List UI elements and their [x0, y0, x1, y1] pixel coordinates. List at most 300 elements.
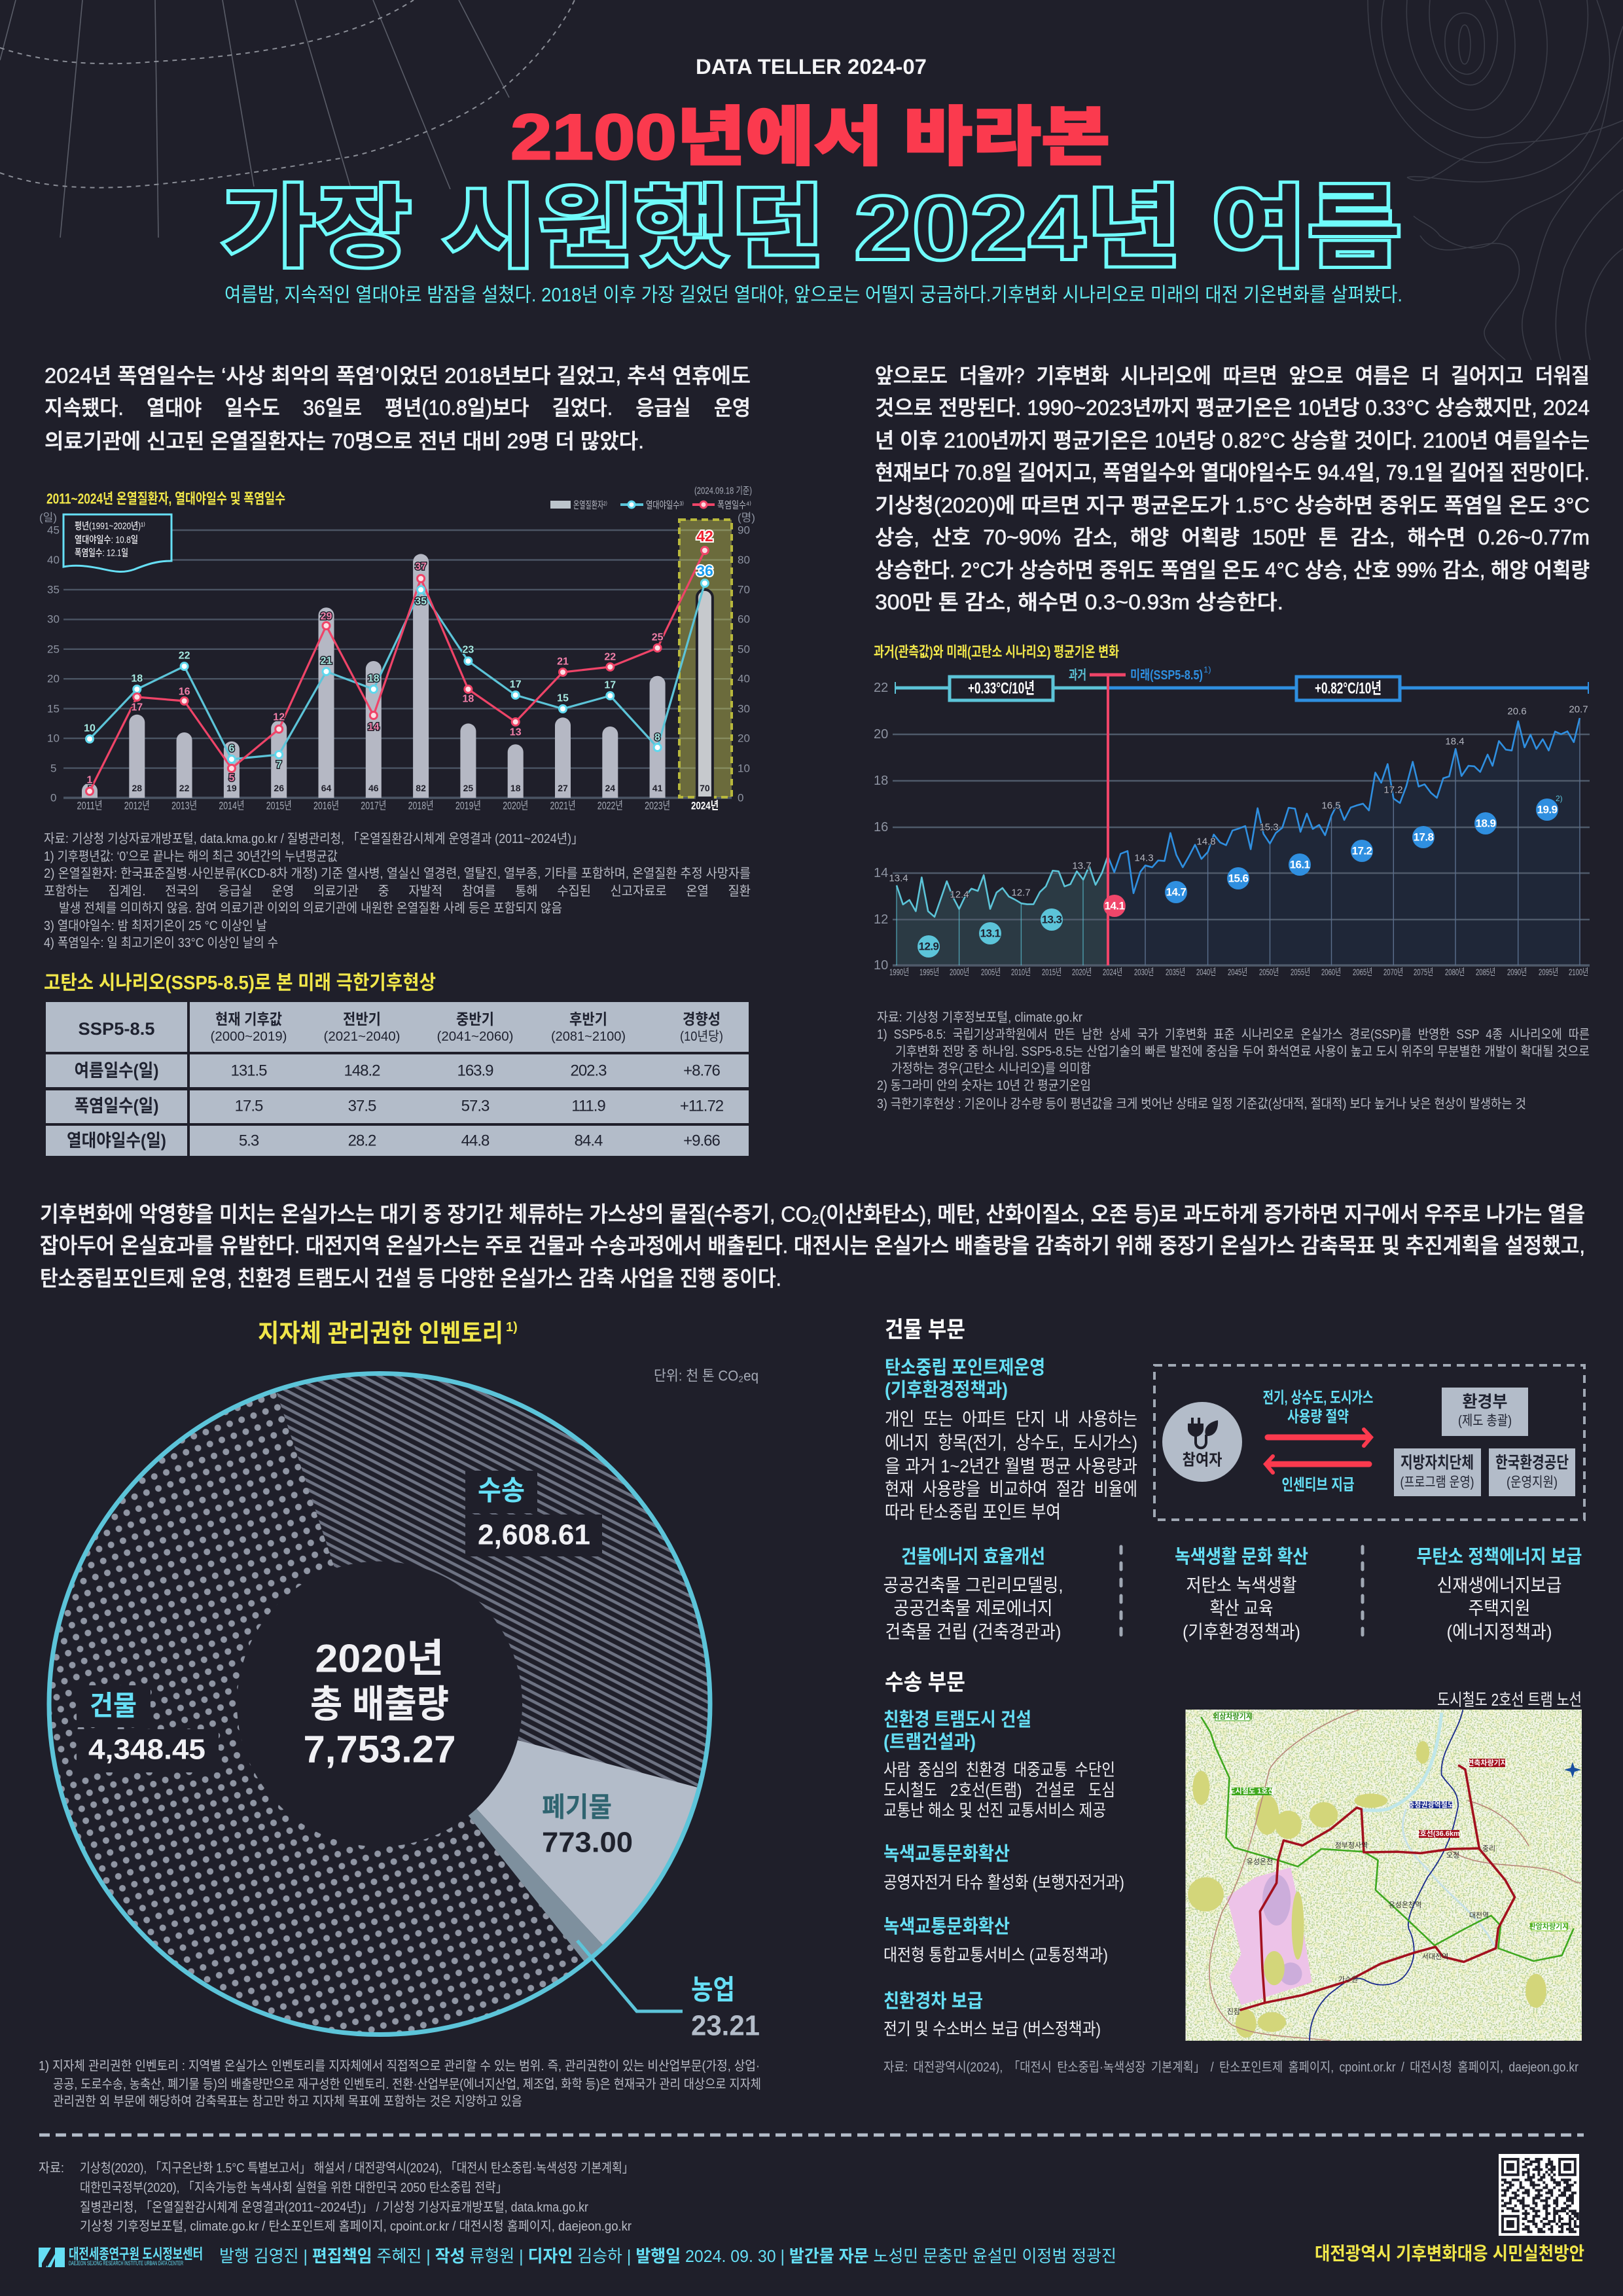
source notes for chart 2: 가정하는 경우(고탄소 시나리오)를 의미함: [891, 1061, 1091, 1076]
axis labels: 5: [50, 762, 56, 775]
table header: [79, 1011, 723, 1044]
decade average bubbles: 13.3: [1042, 914, 1061, 925]
footer sources: 자료:: [39, 2161, 64, 2176]
column: green life culture: 저탄소 녹색생활: [1186, 1575, 1297, 1596]
x axis labels: 2000년: [950, 967, 969, 977]
box: environment corporation: 한국환경공단: [1495, 1454, 1569, 1472]
axis labels: 35: [47, 584, 60, 596]
line: heat wave days: [90, 550, 705, 791]
source notes for chart 2: 3) 극한기후현상 : 기온이나 강수량 등이 평년값을 크게 벗어난 상태로 일정 기준값(상대적, 절대적) 보다 높거나 낮은 현상이 발생하는 것: [877, 1096, 1526, 1111]
map: tram line 2: [1186, 1710, 1582, 2041]
intro text right: 것으로 전망된다. 1990~2023년까지 평균기온은 10년당 0.33°C 상승했지만, 2024: [875, 396, 1590, 420]
table header: 전반기: [343, 1011, 381, 1028]
x axis labels: 2020년: [1072, 967, 1092, 977]
x axis labels: 2085년: [1476, 967, 1495, 977]
table header: SSP5-8.5: [79, 1019, 154, 1039]
axis labels: (명): [738, 512, 755, 524]
row: summer days: 202.3: [570, 1062, 607, 1080]
y axis labels: 16: [874, 820, 888, 834]
carbon neutral point text: [885, 1357, 1137, 1522]
tram city text: [883, 1709, 1115, 1820]
segment: transport: [276, 1374, 709, 1787]
x axis labels: 2035년: [1166, 967, 1185, 977]
carbon neutral point text: (기후환경정책과): [885, 1379, 1008, 1401]
intro text right: 기상청(2020)에 따르면 지구 평균온도가 1.5°C 상승하면 중위도 폭염일 온도 3°C: [875, 493, 1590, 517]
value labels: tropical nights: 21: [321, 656, 332, 666]
callout: normal values: 평년(1991~2020년)¹⁾: [75, 521, 145, 531]
value labels: tropical nights: 15: [557, 692, 569, 704]
arrow: saving: [1268, 1429, 1371, 1446]
source notes for chart 1: [44, 831, 751, 950]
value labels: heat wave days: 13: [510, 726, 522, 738]
header: [221, 55, 1402, 306]
segment: agriculture: [469, 1809, 603, 1962]
label: saving: [1263, 1389, 1373, 1426]
table header: (10년당): [680, 1029, 723, 1044]
value labels: 14.3: [1134, 852, 1154, 864]
row: summer days: 148.2: [344, 1062, 380, 1080]
intro text left: 지속됐다. 열대야 일수도 36일로 평년(10.8일)보다 길었다. 응급실 운영: [45, 396, 751, 420]
row: heat wave days: 57.3: [461, 1097, 490, 1115]
column: building energy efficiency: 건물에너지 효율개선: [901, 1546, 1045, 1568]
y axis labels: 10: [874, 958, 888, 973]
footer sources: 대한민국정부(2020), 「지속가능한 녹색사회 실현을 위한 대한민국 2050 탄소중립 전략」: [80, 2180, 507, 2195]
legend: 온열질환자²⁾: [573, 500, 607, 511]
value labels: 20.6: [1507, 706, 1527, 717]
source notes for chart 1: 2) 온열질환자: 한국표준질병·사인분류(KCD-8차 개정) 기준 열사병, 열실신 열경련, 열탈진, 열부종, 기타를 포함하며, 온열질환 추정 사망자를: [44, 866, 751, 881]
tram city text: 친환경 트램도시 건설: [883, 1709, 1031, 1731]
axis labels: 80: [738, 554, 750, 566]
axis labels: 90: [738, 524, 750, 537]
participant circle: [1162, 1402, 1242, 1482]
value labels: heat wave days: 25: [652, 632, 664, 643]
bar value labels: [87, 783, 710, 793]
column: green life culture: 확산 교육: [1209, 1598, 1274, 1618]
x axis labels: 2010년: [1011, 967, 1031, 977]
grid lines: [63, 530, 732, 798]
value labels: heat wave days: 18: [463, 694, 474, 704]
value labels: 13.7: [1072, 860, 1092, 872]
line: tropical nights: [90, 583, 705, 759]
column: building energy efficiency: [883, 1546, 1063, 1641]
mid paragraph: [40, 1202, 1585, 1291]
subtitle: 여름밤, 지속적인 열대야로 밤잠을 설쳤다. 2018년 이후 가장 길었던 열대야, 앞으로는 어떨지 궁금하다.기후변화 시나리오로 미래의 대전 기온변화를 살펴봤다.: [224, 284, 1402, 306]
legend: 열대야일수³⁾: [646, 500, 684, 511]
bar value labels: 22: [179, 783, 190, 793]
value labels: tropical nights: 18: [368, 673, 380, 685]
decade average bubbles: 12.9: [919, 940, 938, 953]
intro text left: [45, 364, 751, 453]
year labels: 2019년: [455, 800, 481, 812]
table: extreme climate under SSP5-8.5: [44, 973, 749, 1156]
value labels: heat wave days: 5: [228, 772, 234, 784]
eco car text: 친환경차 보급: [883, 1990, 983, 2012]
section heading: 수송 부문: [885, 1670, 965, 1695]
intro text right: 상승한다. 2°C가 상승하면 중위도 폭염일 온도 4°C 상승, 산호 99% 감소, 해양 어획량: [875, 558, 1590, 582]
bar value labels: 5: [87, 783, 92, 793]
bar value labels: 25: [463, 783, 473, 793]
label: buildings: 건물: [90, 1690, 137, 1721]
table title: 고탄소 시나리오(SSP5-8.5)로 본 미래 극한기후현상: [44, 973, 436, 994]
row: summer days: 여름일수(일): [75, 1061, 158, 1081]
value labels: 12.7: [1011, 888, 1031, 898]
year labels: 2022년: [597, 800, 623, 812]
carbon neutral point text: 개인 또는 아파트 단지 내 사용하는: [885, 1408, 1137, 1429]
row: heat wave days: [75, 1096, 724, 1116]
map tags: 유성온천역: [1389, 1900, 1421, 1909]
row: tropical nights: +9.66: [683, 1132, 721, 1149]
y axis labels: [874, 681, 888, 973]
row: tropical nights: [67, 1131, 721, 1151]
bar value labels: 46: [368, 783, 379, 793]
label: agriculture: 농업: [691, 1974, 735, 2005]
bike text: 공영자전거 타슈 활성화 (보행자전거과): [883, 1873, 1124, 1892]
carbon neutral point text: 에너지 항목(전기, 상수도, 도시가스): [885, 1432, 1137, 1453]
table header: (2081~2100): [551, 1030, 626, 1044]
axis labels: 25: [47, 643, 60, 656]
trend bar: future: [1108, 677, 1588, 700]
intro text right: 상승, 산호 70~90% 감소, 해양 어획량 150만 톤 감소, 해수면 0.26~0.77m: [875, 526, 1590, 549]
donut footnote: 관리권한 외 부문에 해당하여 감축목표는 참고만 하고 지자체 목표에 포함하는 것은 지양하고 있음: [53, 2094, 522, 2109]
value labels: heat wave days: 14: [368, 721, 380, 733]
row: heat wave days: +11.72: [680, 1097, 724, 1115]
axis labels: (일): [39, 512, 57, 524]
column: building energy efficiency: 공공건축물 그린리모델링,: [883, 1575, 1063, 1596]
section: transport sector: [883, 1670, 1582, 2075]
x axis labels: 2065년: [1353, 967, 1372, 977]
axis labels: 30: [738, 703, 750, 715]
2024 highlight: [679, 520, 732, 797]
markers: heat wave days: [86, 547, 708, 795]
x axis labels: 2045년: [1228, 967, 1247, 977]
box: ministry: (제도 총괄): [1458, 1414, 1512, 1428]
intro text right: 300만 톤 감소, 해수면 0.3~0.93m 상승한다.: [875, 590, 1283, 614]
trend bar: past: [895, 677, 1108, 700]
bar value labels: 18: [510, 783, 521, 793]
issue label: DATA TELLER 2024-07: [696, 55, 927, 79]
decade average bubbles: 18.9: [1476, 817, 1495, 830]
map tags: 오정: [1446, 1851, 1459, 1859]
y axis labels: 12: [874, 912, 888, 927]
x axis labels: 2055년: [1291, 967, 1310, 977]
bar value labels: 28: [132, 783, 142, 793]
intro text right: 년 이후 2100년까지 평균기온은 10년당 0.82°C 상승할 것이다. 2100년 여름일수는: [875, 429, 1590, 452]
x axis labels: 2030년: [1134, 967, 1154, 977]
chart title: 과거(관측값)와 미래(고탄소 시나리오) 평균기온 변화: [874, 644, 1119, 660]
map tags: 중리: [1482, 1844, 1495, 1853]
leader line: agriculture: [577, 1941, 683, 2011]
label: buildings: [77, 1685, 219, 1772]
bar value labels: 27: [558, 783, 568, 793]
map tags: 2호선(36.6km): [1416, 1829, 1463, 1838]
bike text: [883, 1843, 1124, 1892]
logo: institute: [39, 2246, 203, 2267]
decade average bubbles: 13.1: [980, 927, 1000, 940]
box: environment corporation: [1489, 1448, 1575, 1496]
map tags: 충청권광역철도: [1408, 1800, 1454, 1809]
x axis labels: 2015년: [1042, 967, 1061, 977]
source notes for chart 2: [877, 1010, 1590, 1111]
column: building energy efficiency: 공공건축물 제로에너지: [894, 1598, 1052, 1618]
bike text: 녹색교통문화확산: [883, 1843, 1010, 1865]
divider 2024: 1): [1204, 665, 1211, 674]
label: transport: 수송: [478, 1475, 525, 1505]
carbon neutral point text: 현재 사용량을 비교하여 절감 비율에: [885, 1479, 1137, 1499]
label: waste: [542, 1792, 633, 1859]
axis labels: [39, 512, 755, 804]
x axis labels: 2090년: [1507, 967, 1527, 977]
table header: (2021~2040): [323, 1030, 401, 1044]
arrow: incentive: [1266, 1456, 1369, 1473]
source notes for chart 1: 자료: 기상청 기상자료개방포털, data.kma.go.kr / 질병관리청, 「온열질환감시체계 운영결과 (2011~2024년)」: [44, 831, 583, 846]
trend bar: past: +0.33°C/10년: [968, 679, 1035, 698]
map tags: 가수원: [1338, 1975, 1358, 1984]
value labels: tropical nights: 35: [415, 596, 427, 607]
axis labels: 20: [738, 732, 750, 745]
year labels: [77, 800, 719, 812]
value labels: tropical nights: 7: [276, 759, 282, 771]
intro text left: 의료기관에 신고된 온열질환자는 70명으로 전년 대비 29명 더 많았다.: [45, 429, 644, 453]
donut chart: local-authority inventory: [49, 1320, 760, 2042]
decade average bubbles: 19.9: [1537, 804, 1557, 816]
value labels: [889, 704, 1588, 901]
integrated transport text: 대전형 통합교통서비스 (교통정책과): [883, 1945, 1108, 1965]
y axis labels: 18: [874, 774, 888, 788]
year labels: 2012년: [124, 800, 150, 812]
box: local government: 지방자치단체: [1400, 1454, 1474, 1472]
center total: 2020년: [315, 1636, 444, 1681]
axis labels: 15: [47, 703, 60, 715]
value labels: 18.4: [1445, 736, 1465, 747]
row: tropical nights: 28.2: [348, 1132, 376, 1149]
x axis labels: 2095년: [1539, 967, 1558, 977]
value labels: heat wave days: 1: [87, 775, 93, 785]
column: building energy efficiency: 건축물 건립 (건축경관과): [885, 1622, 1061, 1641]
bar value labels: 41: [652, 783, 663, 793]
y axis labels: 20: [874, 727, 888, 742]
bar value labels: 64: [321, 783, 331, 793]
column: carbon-free energy: 무탄소 정책에너지 보급: [1416, 1546, 1582, 1568]
segment: waste: [476, 1740, 699, 1946]
section: building sector: [883, 1318, 1584, 1641]
box: environment corporation: (운영지원): [1507, 1475, 1558, 1490]
value labels: tropical nights: 10: [84, 723, 96, 734]
icon: compass: [1564, 1762, 1581, 1778]
row: summer days: [75, 1061, 721, 1081]
axis labels: 60: [738, 613, 750, 626]
value labels: 12.4: [950, 889, 969, 901]
value labels: heat wave days: 21: [557, 656, 569, 668]
integrated transport text: [883, 1916, 1108, 1965]
x axis labels: 2050년: [1259, 967, 1279, 977]
axis labels: 40: [47, 554, 60, 566]
axis labels: 50: [738, 643, 750, 656]
label: agriculture: 23.21: [691, 2009, 760, 2042]
value labels: 14.8: [1196, 836, 1216, 847]
axis labels: 10: [47, 732, 60, 745]
diagram: carbon point flow: [1154, 1365, 1584, 1520]
section heading: 건물 부문: [885, 1318, 965, 1342]
x axis labels: 2040년: [1196, 967, 1216, 977]
x axis labels: 2075년: [1414, 967, 1433, 977]
donut footnote: [39, 2058, 761, 2109]
x axis labels: 2070년: [1383, 967, 1403, 977]
table header: (2041~2060): [437, 1030, 513, 1044]
column: green life culture: [1175, 1546, 1308, 1641]
label: buildings: 4,348.45: [88, 1733, 205, 1766]
decade average bubbles: 15.6: [1228, 872, 1248, 885]
y axis labels: 14: [874, 866, 888, 880]
donut footnote: 공공, 도로수송, 농축산, 폐기물 등)의 배출량만으로 재구성한 인벤토리. 전환·산업부문(에너지산업, 제조업, 화학 등)은 현재국가 관리 대상으로 지자체: [53, 2077, 761, 2092]
value labels: heat wave days: 16: [179, 686, 190, 698]
row: heat wave days: 111.9: [571, 1097, 605, 1115]
row: summer days: 163.9: [457, 1062, 493, 1080]
row: tropical nights: 5.3: [239, 1132, 259, 1149]
footer sources: 질병관리청, 「온열질환감시체계 운영결과(2011~2024년)」 / 기상청 기상자료개방포털, data.kma.go.kr: [80, 2200, 588, 2215]
outer ring: [49, 1373, 710, 2034]
table header: 현재 기후값: [215, 1011, 282, 1028]
value labels: tropical nights: 22: [179, 651, 190, 661]
source notes for chart 1: 4) 폭염일수: 일 최고기온이 33°C 이상인 날의 수: [44, 935, 278, 950]
callout: normal values: 열대야일수: 10.8일: [75, 534, 138, 546]
mid paragraph: 탄소중립포인트제 운영, 친환경 트램도시 건설 등 다양한 온실가스 감축 사업을 진행 중이다.: [40, 1266, 781, 1291]
label: incentive: 인센티브 지급: [1281, 1477, 1355, 1494]
row: tropical nights: 84.4: [575, 1132, 603, 1149]
row: heat wave days: 폭염일수(일): [75, 1096, 158, 1116]
map tags: 외삼차량기지: [1213, 1712, 1253, 1721]
column: green life culture: 녹색생활 문화 확산: [1175, 1546, 1308, 1568]
value labels: heat wave days: 42: [696, 528, 713, 545]
logo: institute: DAEJEON SEJONG RESEARCH INSTITUTE URBAN DATA CENTER: [69, 2260, 183, 2267]
map tags: 진잠: [1227, 2007, 1240, 2016]
tram city text: 교통난 해소 및 선진 교통서비스 제공: [883, 1801, 1106, 1820]
title line 2: 가장 시원했던 2024년 여름: [221, 177, 1402, 279]
year labels: 2011년: [77, 800, 102, 812]
x axis labels: 2100년: [1569, 967, 1588, 977]
label: transport: [465, 1471, 602, 1556]
row: summer days: 131.5: [230, 1062, 267, 1080]
map tags: 정부청사역: [1335, 1841, 1368, 1850]
box: ministry: 환경부: [1462, 1393, 1508, 1411]
value labels: 16.5: [1321, 800, 1341, 812]
decade average bubbles: 14.1: [1105, 899, 1124, 912]
x axis labels: [889, 967, 1588, 977]
value labels: tropical nights: 17: [604, 679, 616, 691]
decade average bubbles: 16.1: [1290, 859, 1310, 870]
axis labels: 70: [738, 584, 750, 596]
year labels: 2013년: [171, 800, 197, 812]
participant circle: 참여자: [1182, 1452, 1222, 1469]
decorative globe lines: [0, 0, 575, 238]
column: green life culture: (기후환경정책과): [1183, 1622, 1300, 1641]
chart title: 2011~2024년 온열질환자, 열대야일수 및 폭염일수: [46, 491, 285, 507]
temperature lines: [897, 718, 1580, 917]
year labels: 2020년: [503, 800, 528, 812]
box: local government: (프로그램 운영): [1400, 1475, 1474, 1490]
row: heat wave days: 37.5: [348, 1097, 376, 1115]
eco car text: [883, 1990, 1101, 2039]
temperature area fills: [897, 718, 1580, 965]
year labels: 2014년: [219, 800, 244, 812]
tram city text: 사람 중심의 친환경 대중교통 수단인: [883, 1760, 1115, 1780]
center total: 총 배출량: [310, 1683, 449, 1725]
table header: 경향성: [683, 1011, 721, 1028]
label: agriculture: [691, 1974, 760, 2042]
row: tropical nights: 열대야일수(일): [67, 1131, 166, 1151]
source notes for chart 2: 2) 동그라미 안의 숫자는 10년 간 평균기온임: [877, 1078, 1091, 1093]
year labels: 2015년: [266, 800, 292, 812]
x axis labels: 2060년: [1321, 967, 1341, 977]
axis labels: 40: [738, 673, 750, 685]
x axis labels: 2005년: [981, 967, 1001, 977]
intro text right: 앞으로도 더울까? 기후변화 시나리오에 따르면 앞으로 여름은 더 길어지고 더워질: [875, 364, 1590, 387]
map caption: 도시철도 2호선 트램 노선: [1437, 1690, 1582, 1710]
source notes for chart 2: 자료: 기상청 기후정보포털, climate.go.kr: [877, 1010, 1082, 1025]
map tags: 대전역: [1469, 1911, 1489, 1920]
label: waste: 폐기물: [542, 1792, 612, 1822]
value labels: heat wave days: 37: [415, 562, 427, 572]
divider 2024: 과거: [1069, 668, 1086, 683]
year labels: 2024년: [691, 800, 719, 812]
donut chart: local-authority inventory: 1): [506, 1320, 518, 1335]
bar value labels: 19: [226, 783, 237, 793]
grid lines: [893, 734, 1590, 965]
x axis labels: 2024년: [1103, 967, 1122, 977]
value labels: tropical nights: 6: [228, 744, 234, 754]
donut footnote: 1) 지자체 관리권한 인벤토리 : 지역별 온실가스 인벤토리를 지자체에서 직접적으로 관리할 수 있는 범위. 즉, 관리권한이 있는 비산업부문(가정, 상업·: [39, 2058, 760, 2073]
divider 2024: [1069, 665, 1211, 965]
value labels: heat wave days: [87, 528, 713, 785]
row: heat wave days: 17.5: [235, 1097, 263, 1115]
axis labels: 10: [738, 762, 750, 775]
x axis labels: 2080년: [1445, 967, 1465, 977]
x axis labels: 1995년: [919, 967, 939, 977]
chart title: 지자체 관리권한 인벤토리: [258, 1320, 503, 1348]
decade average bubbles: 17.2: [1352, 844, 1372, 857]
carbon neutral point text: 탄소중립 포인트제운영: [885, 1357, 1045, 1378]
map tags: 판암차량기지: [1529, 1922, 1569, 1931]
year labels: 2016년: [313, 800, 339, 812]
divider 2024: 미래(SSP5-8.5): [1130, 668, 1203, 683]
source notes for chart 1: 3) 열대야일수: 밤 최저기온이 25 °C 이상인 날: [44, 918, 267, 933]
decade average bubbles: 17.8: [1414, 831, 1433, 843]
center total: [304, 1636, 455, 1771]
footer sources: 기상청 기후정보포털, climate.go.kr / 탄소포인트제 홈페이지, cpoint.or.kr / 대전시청 홈페이지, daejeon.go.kr: [80, 2219, 632, 2234]
year labels: 2017년: [361, 800, 386, 812]
column: carbon-free energy: (에너지정책과): [1446, 1622, 1552, 1641]
date note: (2024.09.18 기준): [694, 486, 752, 496]
value labels: tropical nights: 8: [654, 732, 660, 744]
map tags: 서대전역: [1422, 1952, 1448, 1961]
carbon neutral point text: 을 과거 1~2년간 월별 평균 사용량과: [885, 1456, 1137, 1477]
column: carbon-free energy: [1416, 1546, 1582, 1641]
value labels: 13.4: [889, 873, 908, 884]
footer sources: [39, 2161, 633, 2234]
map tags: 연축차량기지: [1467, 1758, 1507, 1767]
footer sources: 기상청(2020), 「지구온난화 1.5°C 특별보고서」 해설서 / 대전광역시(2024), 「대전시 탄소중립·녹색성장 기본계획」: [80, 2161, 633, 2176]
intro text right: [875, 364, 1590, 614]
unit note: 단위: 천 톤 CO₂eq: [654, 1368, 758, 1384]
segment: buildings: [50, 1391, 585, 2034]
value labels: heat wave days: 29: [321, 611, 332, 622]
value labels: tropical nights: 18: [131, 673, 143, 685]
table cells: [46, 1002, 749, 1156]
value labels: heat wave days: 17: [131, 702, 143, 713]
markers: tropical nights: [86, 580, 708, 763]
bar value labels: 24: [605, 783, 615, 793]
value labels: tropical nights: [84, 562, 713, 771]
axis labels: 0: [738, 792, 743, 804]
